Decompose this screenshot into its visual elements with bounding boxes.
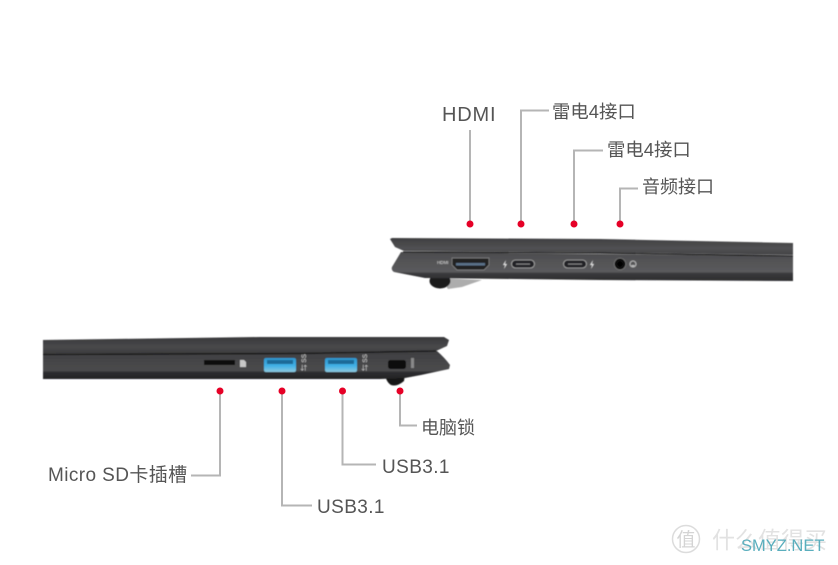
hinge foot <box>430 274 482 289</box>
HDMI label on laptop: HDMI <box>437 260 448 265</box>
Thunderbolt icon 2 <box>590 260 594 269</box>
label: USB3.1 second: USB3.1 <box>382 457 450 478</box>
watermark badge <box>672 526 700 552</box>
callout: USB3.1 first <box>278 388 385 518</box>
watermark site name: SMYZ.NET <box>741 537 824 555</box>
SD icon <box>240 360 246 367</box>
label: lock: 电脑锁 <box>421 418 475 438</box>
USB icon 1: ⇆ SS <box>299 353 308 371</box>
USB port 1 <box>264 358 296 372</box>
callout: HDMI <box>442 104 496 228</box>
callout: audio <box>616 177 714 228</box>
audio jack <box>614 258 626 270</box>
lock icon <box>411 358 414 368</box>
hinge foot right <box>350 369 410 386</box>
USB-C port 2 <box>564 260 586 268</box>
callout: Micro SD <box>48 388 224 486</box>
laptop lid <box>390 238 793 255</box>
laptop: bottom view with SD, USB and lock ports <box>43 337 450 386</box>
Thunderbolt icon 1 <box>503 260 507 269</box>
label: HDMI: HDMI <box>442 104 496 126</box>
watermark badge: 值 <box>676 529 696 551</box>
callout: Thunderbolt 4 second <box>570 139 691 228</box>
USB icon 2: ⇆ SS <box>360 353 369 371</box>
laptop base <box>43 351 450 379</box>
laptop lid <box>43 337 449 354</box>
USB-C port 1 <box>512 260 534 268</box>
USB port 2 <box>325 358 357 372</box>
label: Micro SD: Micro SD卡插槽 <box>48 464 188 486</box>
watermark <box>672 526 827 555</box>
callout: USB3.1 second <box>339 388 450 478</box>
watermark Chinese text: 什么值得买 <box>712 527 827 553</box>
seam <box>43 351 436 354</box>
label: Thunderbolt 4 first: 雷电4接口 <box>552 101 636 122</box>
callout: lock <box>396 388 475 438</box>
label: Thunderbolt 4 second: 雷电4接口 <box>607 139 691 160</box>
laptop: top view with HDMI, Thunderbolt and audio ports <box>390 238 793 289</box>
headphone icon <box>630 261 636 267</box>
lock slot <box>388 360 406 369</box>
HDMI port <box>452 258 489 270</box>
seam <box>403 252 793 256</box>
laptop base <box>392 252 793 281</box>
label: USB3.1 first: USB3.1 <box>317 497 385 518</box>
label: audio: 音频接口 <box>642 177 714 197</box>
callout: Thunderbolt 4 first <box>518 101 636 228</box>
SD card slot <box>204 360 235 365</box>
